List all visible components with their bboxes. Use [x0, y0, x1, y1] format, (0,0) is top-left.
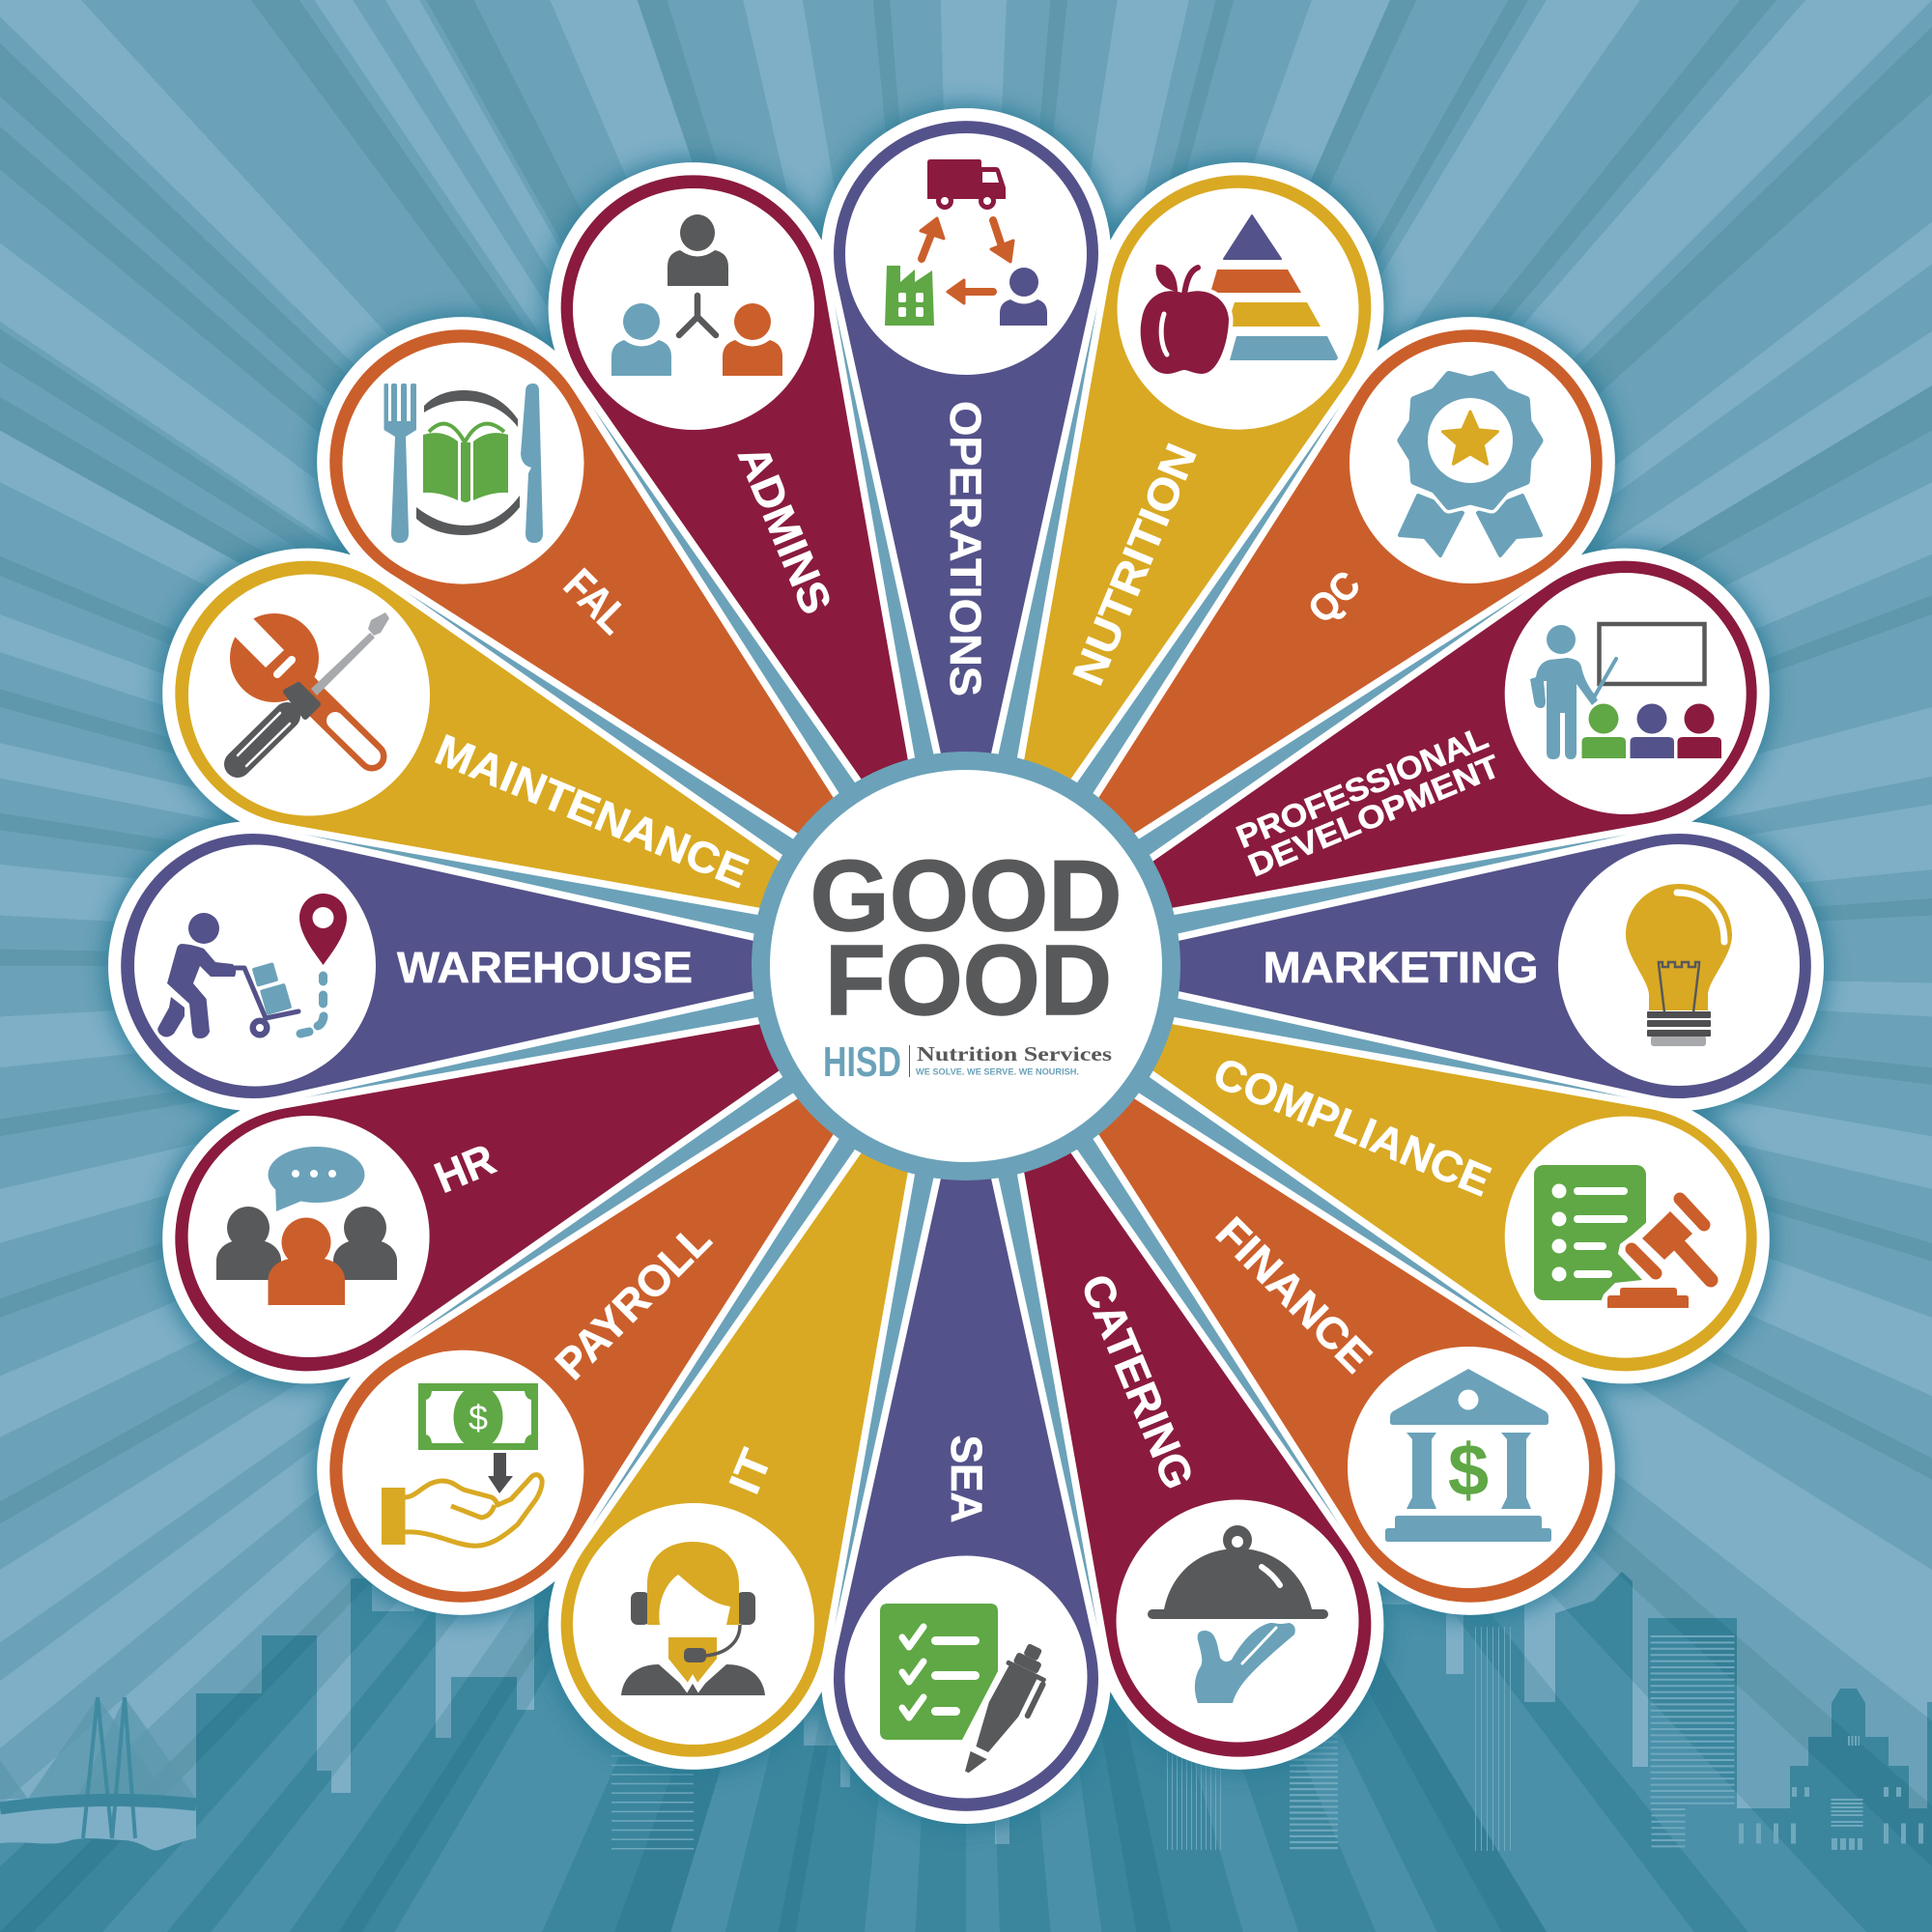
icon: award ribbon	[1400, 375, 1541, 555]
icon: teacher and students	[1530, 624, 1721, 759]
panel: Operations	[834, 121, 1098, 867]
label: Warehouse: WAREHOUSE	[397, 943, 693, 992]
label: Payroll: PAYROLL	[546, 1214, 721, 1389]
panel: Catering	[881, 1007, 1411, 1798]
label: Maintenance: MAINTENANCE	[429, 724, 755, 897]
title: Good Food: GOOD	[810, 840, 1122, 952]
panel: Finance	[942, 942, 1657, 1657]
blue slivers between wedges	[286, 286, 1646, 1646]
panel: Admins	[521, 134, 1051, 925]
label: Professional Development: PROFESSIONAL	[1232, 719, 1493, 855]
panel: Maintenance	[134, 521, 925, 1051]
icon: org chart	[611, 214, 782, 376]
label: Operations: OPERATIONS	[941, 401, 990, 696]
title: Good Food: FOOD	[825, 924, 1112, 1036]
wheel white base	[108, 108, 1824, 1824]
icon: cloche and hand	[1148, 1525, 1328, 1703]
icon: apple and food pyramid	[1141, 215, 1338, 374]
label: Catering: CATERING	[1071, 1267, 1204, 1496]
logo: HISD Nutrition Services: HISD	[823, 1038, 901, 1086]
icon: light bulb	[1626, 884, 1732, 1046]
label: Finance: FINANCE	[1207, 1208, 1381, 1382]
panel: Warehouse	[121, 834, 867, 1098]
skyline details: building windows	[653, 1635, 1932, 1850]
panel: HR	[134, 881, 925, 1411]
icon: wrench and screwdriver	[217, 604, 389, 766]
panel: QC	[942, 275, 1657, 990]
icon: bank: $	[1448, 1430, 1489, 1512]
panel: Compliance	[1007, 881, 1798, 1411]
icon: support agent	[621, 1542, 765, 1695]
skyline details: bridge	[0, 1697, 196, 1851]
panel: Professional Development	[1007, 521, 1798, 1051]
label: QC: QC	[1300, 563, 1369, 632]
title: Good Food	[810, 840, 1122, 1036]
label: Nutrition: NUTRITION	[1063, 437, 1207, 692]
panel: SEA	[834, 1065, 1098, 1811]
icon: fork, book and knife	[384, 384, 543, 543]
logo: HISD Nutrition Services: Nutrition Services	[917, 1042, 1112, 1065]
icon: checklist and pen	[880, 1604, 1059, 1786]
icon: money to hand	[382, 1383, 542, 1546]
shadow glow under wheel	[103, 103, 1829, 1829]
panel: FAL	[275, 275, 990, 990]
icon: money to hand: $	[469, 1398, 488, 1437]
icon: team and speech bubble	[216, 1147, 397, 1305]
label: Marketing: MARKETING	[1264, 943, 1538, 992]
center hub	[752, 752, 1180, 1180]
logo: HISD Nutrition Services: WE SOLVE. WE SERVE. WE NOURISH.	[916, 1066, 1079, 1078]
skyline silhouette	[0, 1572, 1932, 1932]
logo: HISD Nutrition Services	[823, 1038, 1112, 1086]
icon: supply chain	[885, 159, 1047, 326]
label: HR: HR	[428, 1134, 502, 1203]
panel: Marketing	[1065, 834, 1811, 1098]
label: Professional Development: DEVELOPMENT	[1243, 748, 1505, 884]
label: IT: IT	[719, 1442, 781, 1500]
panel: Payroll	[275, 942, 990, 1657]
panel: Nutrition	[881, 134, 1411, 925]
label: Admins: ADMINS	[728, 439, 841, 620]
icon: bank	[1385, 1369, 1551, 1542]
white wedge outlines	[121, 121, 1811, 1811]
label: SEA: SEA	[942, 1435, 991, 1522]
icon: hand truck and map pin	[157, 894, 347, 1038]
label: FAL: FAL	[554, 559, 639, 643]
panel: IT	[521, 1007, 1051, 1798]
label: Compliance: COMPLIANCE	[1207, 1048, 1497, 1206]
icon: checklist and gavel	[1534, 1165, 1719, 1314]
